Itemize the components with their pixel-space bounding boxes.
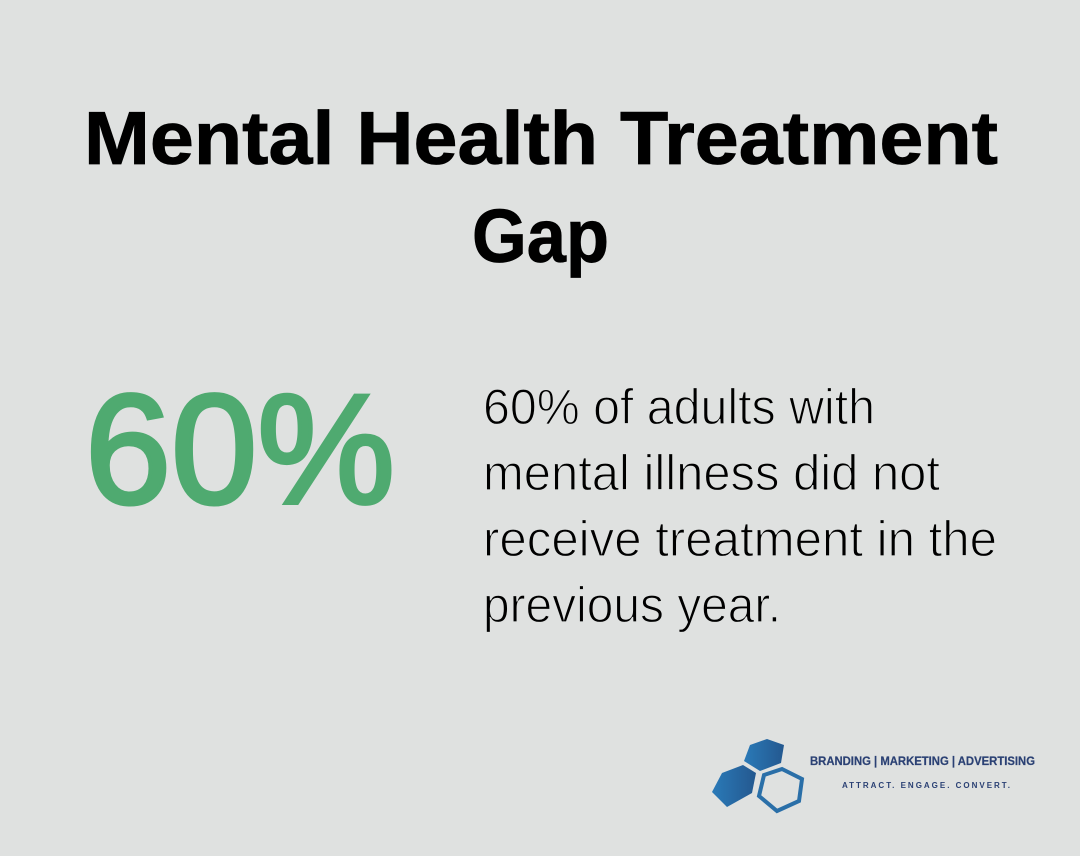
big statistic: 60%: 60% xyxy=(85,363,395,537)
description text: receive treatment in the xyxy=(483,511,997,567)
logo tagline: services: BRANDING | MARKETING | ADVERTISING xyxy=(810,756,1035,768)
icon: filled top hexagon xyxy=(744,739,784,771)
description text xyxy=(483,379,997,633)
description text: 60% of adults with xyxy=(483,379,875,435)
title: Mental Health Treatment xyxy=(84,96,998,180)
logo tagline: attract engage convert: ATTRACT. ENGAGE. CONVERT. xyxy=(842,781,1010,790)
title xyxy=(84,96,998,278)
description text: previous year. xyxy=(483,577,781,633)
logo xyxy=(712,739,1035,811)
icon: outlined hexagon xyxy=(759,769,802,811)
description text: mental illness did not xyxy=(483,445,940,501)
title: Gap xyxy=(472,194,609,278)
icon: filled left hexagon xyxy=(712,765,756,807)
